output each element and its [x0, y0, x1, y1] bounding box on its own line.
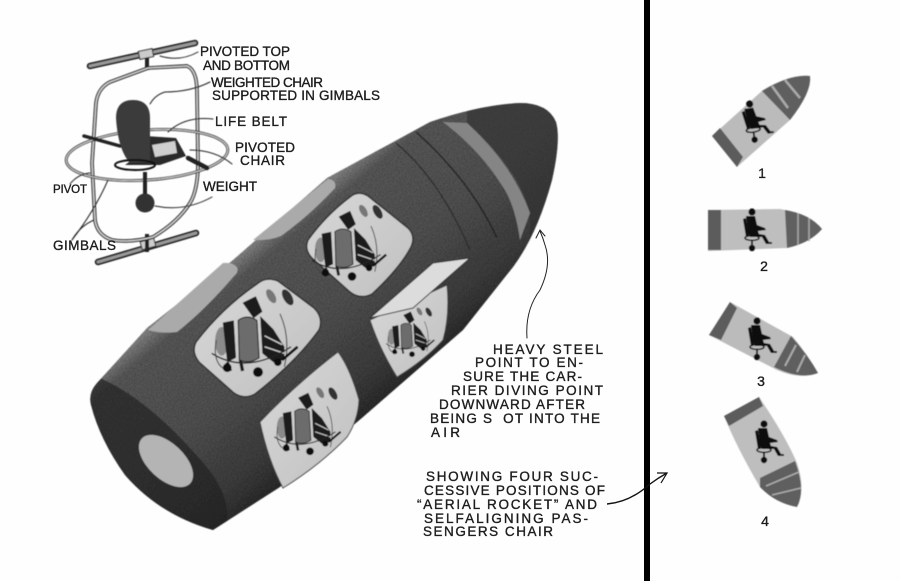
chair back	[116, 100, 150, 163]
text: four positions caption: SELFALIGNING PAS-	[424, 511, 588, 526]
number 3: 3	[757, 373, 765, 389]
gimbal labels: PIVOTED TOP	[200, 44, 290, 59]
gimbal labels	[53, 44, 380, 253]
text: four positions caption	[417, 469, 605, 539]
open door flap	[370, 258, 470, 318]
gimbal labels: PIVOT	[53, 184, 87, 196]
text: heavy steel point: BEING S OT INTO THE	[430, 411, 600, 426]
text: heavy steel point: DOWNWARD AFTER	[439, 397, 585, 412]
gimbal chair diagram	[64, 43, 232, 262]
window: centre cabin	[194, 279, 321, 397]
rear dark band	[90, 378, 228, 530]
position 2 rocket	[708, 208, 822, 251]
gimbal labels: SUPPORTED IN GIMBALS	[212, 88, 380, 103]
upper side port 2	[148, 263, 238, 333]
upper side port 1	[253, 179, 335, 240]
position 1 rocket	[712, 76, 810, 167]
light nose band	[443, 122, 530, 240]
gimbal ring	[64, 124, 230, 186]
gimbal labels: GIMBALS	[53, 238, 116, 253]
weight	[136, 172, 154, 212]
gimbal labels: LIFE BELT	[215, 114, 287, 129]
vertical divider bar	[644, 0, 650, 581]
text: heavy steel point: AIR	[431, 425, 460, 440]
hull ring lines	[396, 132, 497, 250]
position 4 rocket	[724, 397, 802, 507]
outer gimbal frame	[92, 66, 198, 241]
text: heavy steel point	[430, 342, 603, 440]
window: upper cabin	[307, 193, 413, 297]
text: four positions caption: CESSIVE POSITIONS OF	[424, 483, 605, 498]
leader lines	[70, 52, 232, 240]
aerial rocket cutaway	[80, 100, 565, 535]
text: heavy steel point: POINT TO EN-	[475, 355, 583, 370]
gimbal labels: PIVOTED	[235, 140, 295, 155]
bottom pivot bar	[98, 233, 196, 262]
window: lower cabin	[260, 352, 359, 488]
text: four positions caption: “AERIAL ROCKET” AND	[417, 497, 597, 512]
text: heavy steel point: RIER DIVING POINT	[451, 383, 603, 398]
number 2: 2	[760, 258, 768, 274]
position 3 rocket	[709, 302, 818, 376]
text: heavy steel point: HEAVY STEEL	[493, 342, 603, 357]
text: heavy steel point: SURE THE CAR-	[463, 369, 582, 384]
dark nose cone	[467, 100, 565, 240]
rocket body	[90, 103, 558, 530]
gimbal labels: WEIGHT	[203, 179, 257, 194]
text: four positions caption: SENGERS CHAIR	[423, 524, 553, 539]
number 1: 1	[758, 165, 766, 181]
gimbal labels: AND BOTTOM	[203, 58, 290, 73]
base hatch	[130, 425, 202, 497]
text: four positions caption: SHOWING FOUR SUC-	[426, 469, 598, 484]
gimbal labels: WEIGHTED CHAIR	[211, 75, 323, 90]
number 4: 4	[761, 513, 769, 529]
top pivot bar	[90, 43, 195, 70]
pivot pins	[84, 136, 207, 168]
chair seat	[125, 136, 186, 165]
gimbal labels: CHAIR	[240, 153, 285, 168]
window: open door cabin	[370, 285, 448, 377]
arrow: to steel point	[527, 230, 548, 338]
arrow: to positions	[607, 473, 667, 504]
